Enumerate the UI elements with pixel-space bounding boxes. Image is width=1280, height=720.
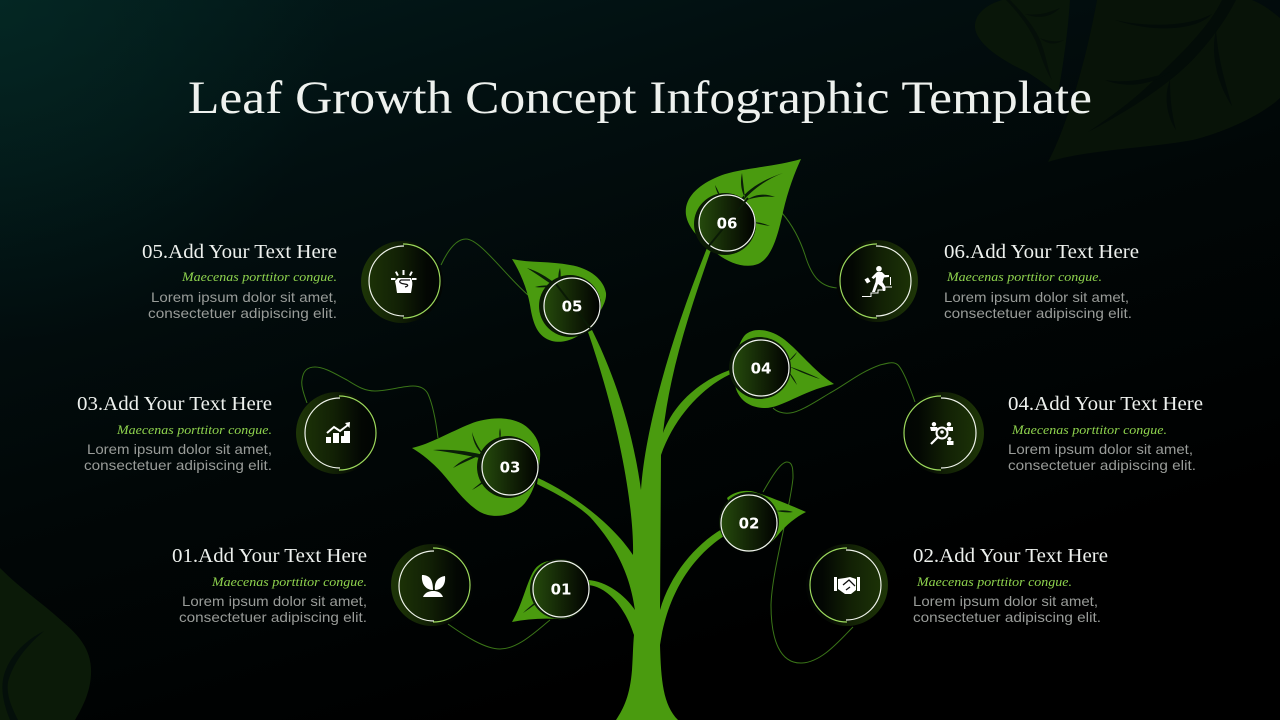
text block 05	[142, 241, 337, 321]
leaf 06	[686, 159, 801, 266]
connector lines	[302, 213, 915, 663]
text block 03	[77, 393, 272, 473]
text block 01	[172, 545, 367, 625]
text block 02	[913, 545, 1108, 625]
background leaf: bottom left	[0, 568, 91, 720]
text block 02: consectetuer adipiscing elit.	[913, 609, 1101, 625]
text block 04: Maecenas porttitor congue.	[1011, 422, 1167, 437]
text block 06: Lorem ipsum dolor sit amet,	[944, 289, 1129, 305]
background leaf: top right small	[975, 0, 1070, 94]
text block 04	[1008, 393, 1203, 473]
icon badge 02: handshake	[806, 544, 888, 626]
icon badge 04: team search	[902, 392, 984, 474]
text block 05: Maecenas porttitor congue.	[181, 269, 337, 284]
text block 06: 06.Add Your Text Here	[944, 241, 1139, 263]
text block 04: 04.Add Your Text Here	[1008, 393, 1203, 415]
leaf 05	[512, 259, 606, 342]
leaf 02	[719, 491, 806, 552]
text block 03: Lorem ipsum dolor sit amet,	[87, 441, 272, 457]
text block 01: consectetuer adipiscing elit.	[179, 609, 367, 625]
text block 06: consectetuer adipiscing elit.	[944, 305, 1132, 321]
number badge 01: 01	[551, 580, 571, 598]
icon badge 01: seedling	[391, 544, 473, 626]
background leaf: top right large	[1048, 0, 1280, 162]
text block 02: Maecenas porttitor congue.	[916, 574, 1072, 589]
text block 01: 01.Add Your Text Here	[172, 545, 367, 567]
title: Leaf Growth Concept Infographic Template	[188, 72, 1092, 124]
number badge 04: 04	[751, 360, 771, 378]
text block 01: Lorem ipsum dolor sit amet,	[182, 593, 367, 609]
icon badge 03: growth chart	[296, 392, 378, 474]
leaf 01	[512, 559, 590, 622]
number badge 06: 06	[717, 214, 737, 232]
number badge 02: 02	[739, 514, 759, 532]
text block 04: consectetuer adipiscing elit.	[1008, 457, 1196, 473]
text block 06: Maecenas porttitor congue.	[946, 269, 1102, 284]
tree stem and branches	[537, 248, 733, 720]
text block 03: 03.Add Your Text Here	[77, 393, 272, 415]
leaf 03	[412, 418, 540, 516]
text block 01: Maecenas porttitor congue.	[211, 574, 367, 589]
text block 04: Lorem ipsum dolor sit amet,	[1008, 441, 1193, 457]
text block 05: Lorem ipsum dolor sit amet,	[151, 289, 337, 305]
text block 02: Lorem ipsum dolor sit amet,	[913, 593, 1098, 609]
text block 05: consectetuer adipiscing elit.	[148, 305, 337, 321]
text block 02: 02.Add Your Text Here	[913, 545, 1108, 567]
number badge 05: 05	[562, 298, 582, 316]
icon badge 05: fist	[361, 241, 443, 323]
leaf 04	[729, 330, 834, 408]
text block 06	[944, 241, 1139, 321]
number badge 03: 03	[500, 458, 520, 476]
text block 05: 05.Add Your Text Here	[142, 241, 337, 263]
text block 03: Maecenas porttitor congue.	[116, 422, 272, 437]
text block 03: consectetuer adipiscing elit.	[84, 457, 272, 473]
icon badge 06: climbing stairs	[836, 240, 918, 322]
